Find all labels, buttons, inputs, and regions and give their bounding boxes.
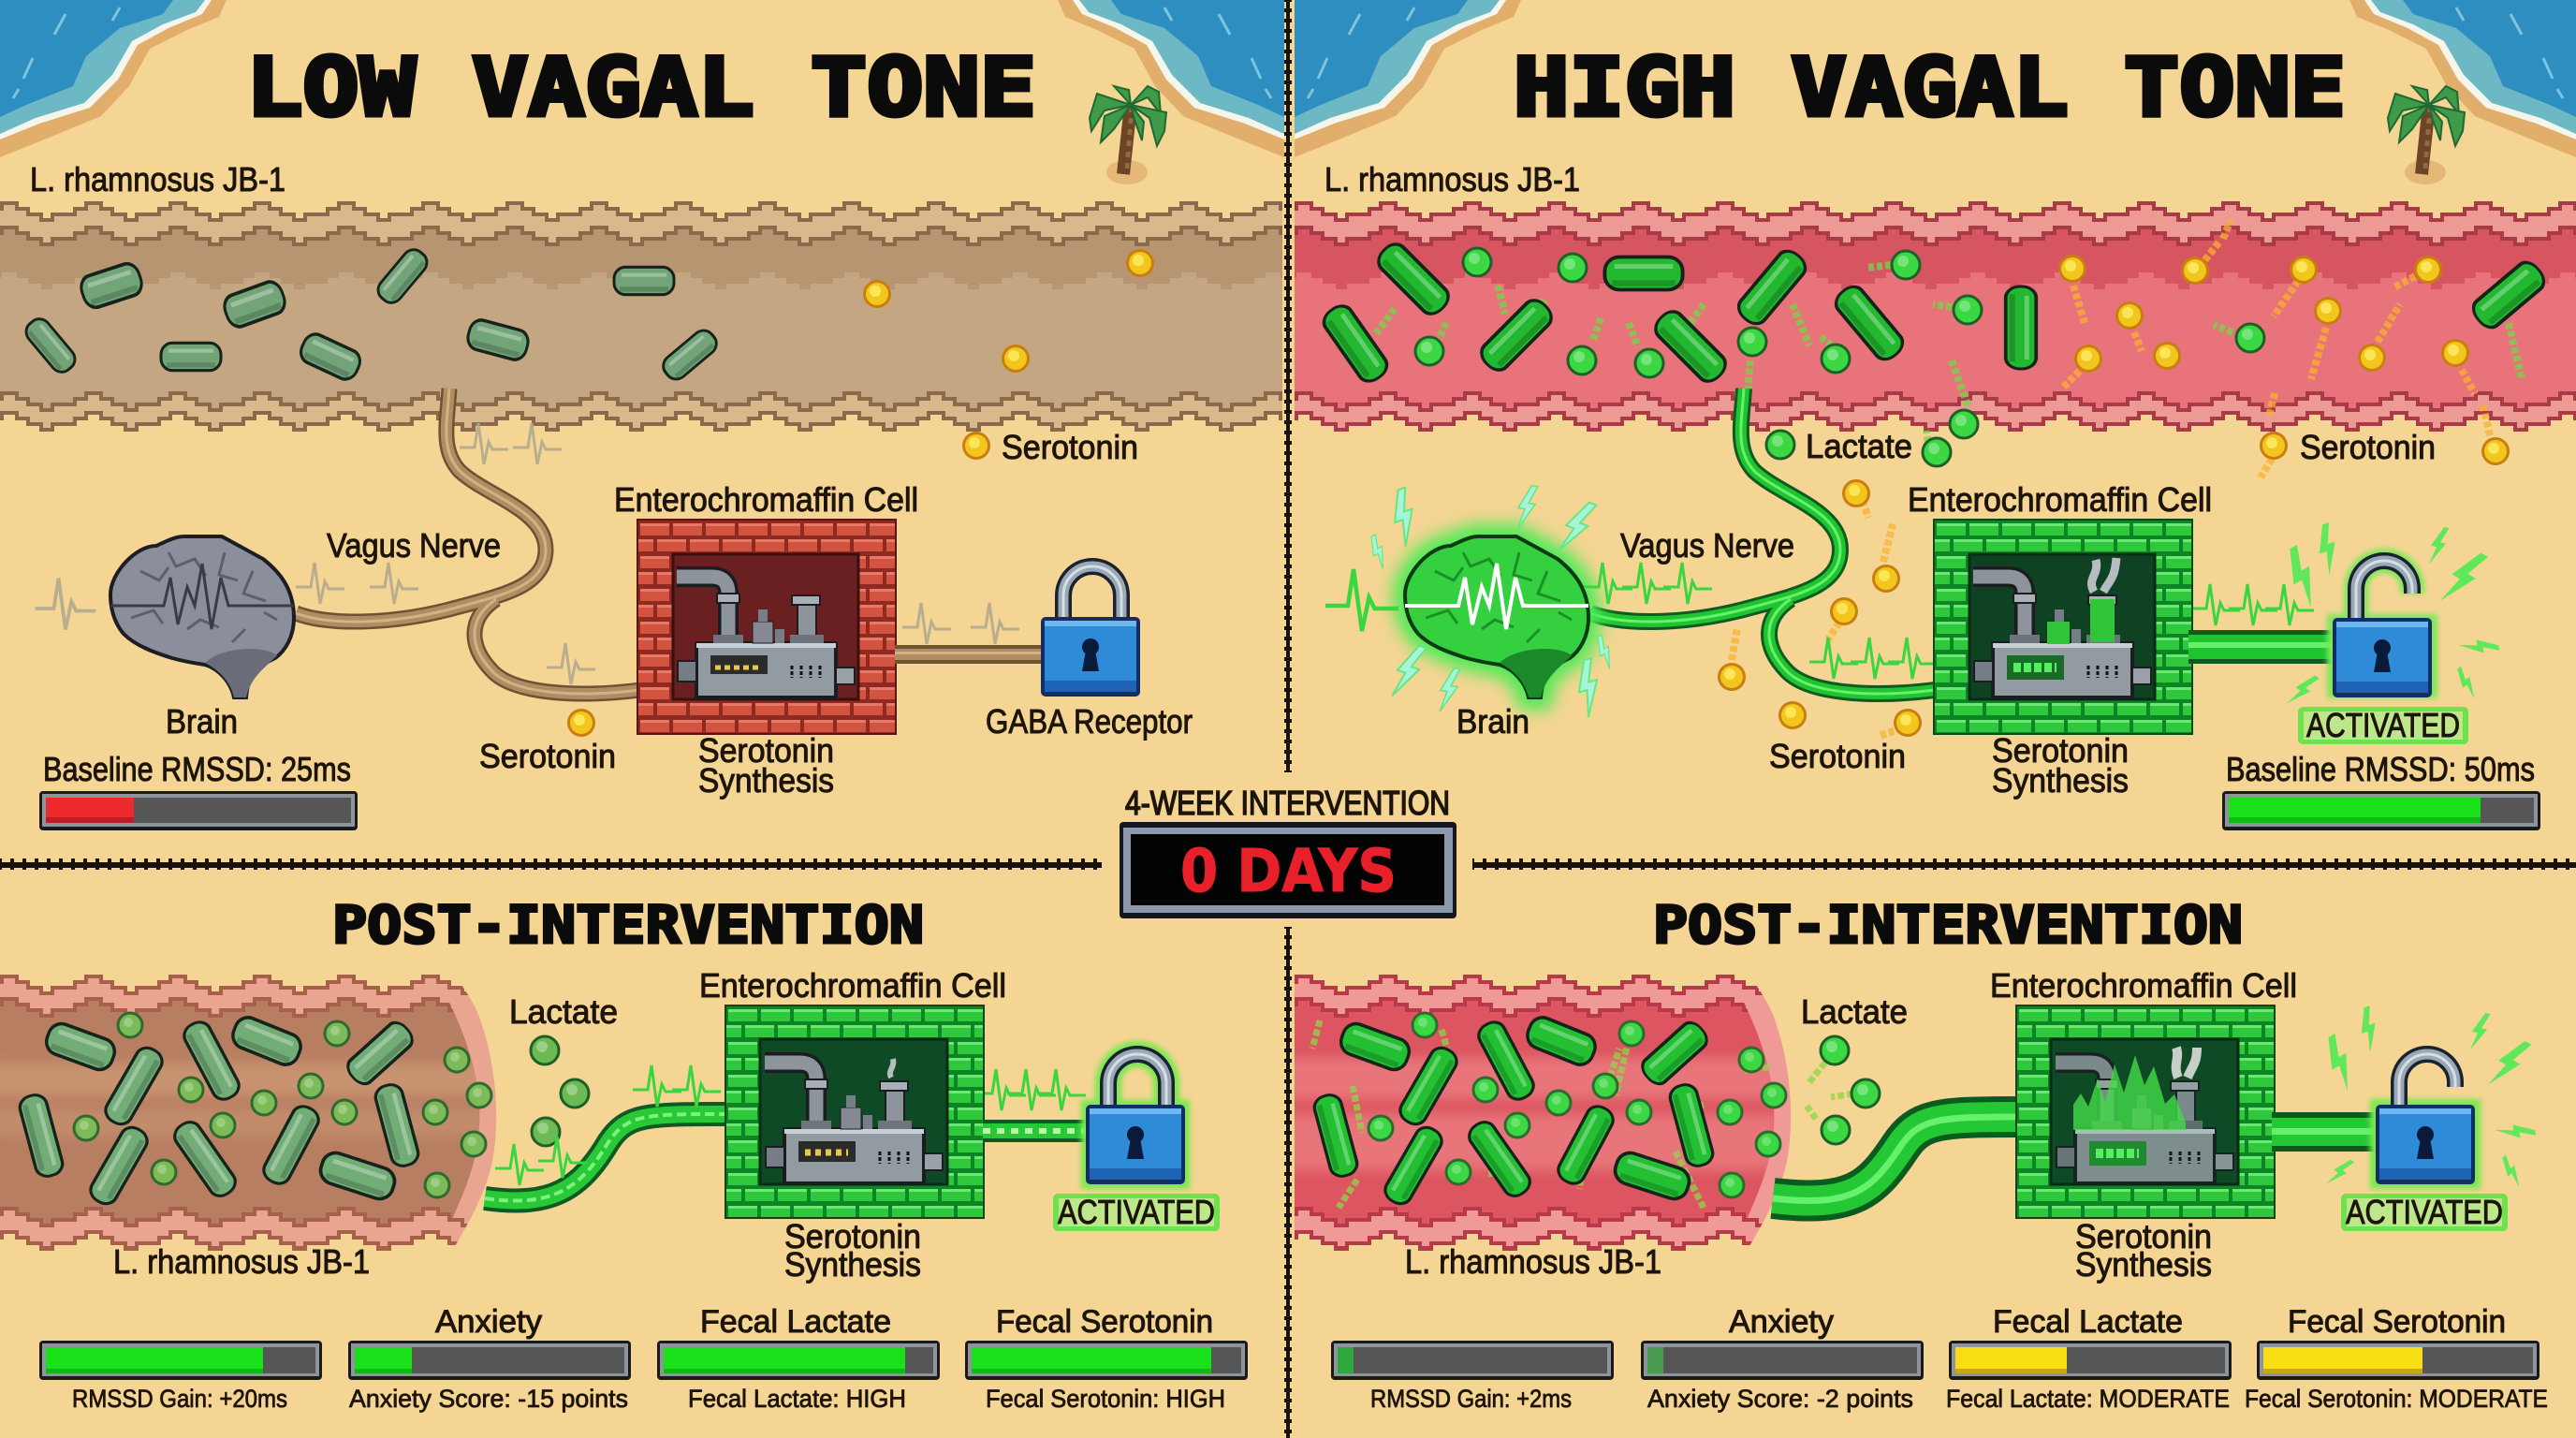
metric: fecal lactate: Fecal Lactate: HIGH (688, 1385, 906, 1413)
metric: fecal serotonin (965, 1304, 1248, 1413)
metric: fecal lactate (1946, 1304, 2232, 1413)
label: vagus nerve: Vagus Nerve (327, 526, 501, 565)
ocean: top left of low tone panel (0, 0, 227, 157)
panel: post-intervention high tone (1276, 895, 2576, 1413)
panel: low vagal tone (0, 41, 1329, 830)
timer display (1120, 822, 1456, 918)
wire to receptor (895, 645, 1041, 664)
lactate molecules in gut (74, 1013, 491, 1197)
label: baseline RMSSD: Baseline RMSSD: 25ms (43, 750, 351, 788)
enterochromaffin cell: green (724, 1005, 985, 1219)
ocean: top right of low tone panel (1058, 0, 1284, 157)
metric: anxiety (1641, 1304, 1924, 1413)
serotonin coins in gut (863, 249, 1154, 373)
bacteria: abundant moderate (18, 1014, 420, 1208)
brain: glowing green with lightning (1365, 484, 1618, 718)
serotonin coin with label (479, 709, 616, 775)
metric: fecal serotonin: Fecal Serotonin (2288, 1304, 2506, 1340)
badge: activated: ACTIVATED (2306, 706, 2460, 744)
faint heartbeat pulses (36, 423, 1019, 684)
metric: fecal lactate: Fecal Lactate (700, 1304, 891, 1340)
label: serotonin synthesis: Serotonin (1992, 731, 2129, 770)
gut cross-section: inflamed pink (1295, 201, 2576, 432)
lactate molecules (1415, 248, 2264, 466)
label: serotonin synthesis (2075, 1217, 2212, 1284)
panel: high vagal tone (1276, 41, 2576, 830)
timer value: 0 DAYS (1180, 837, 1397, 905)
metric: fecal lactate: Fecal Lactate: MODERATE (1946, 1385, 2230, 1413)
label: bacteria strain: L. rhamnosus JB-1 (1405, 1242, 1661, 1281)
metric: anxiety (348, 1304, 631, 1413)
metric: fecal serotonin: Fecal Serotonin (996, 1304, 1213, 1340)
wire to receptor (983, 1120, 1086, 1142)
progress bar: RMSSD low (39, 791, 358, 830)
brain: grey (110, 536, 294, 697)
metric: anxiety: Anxiety Score: -2 points (1647, 1385, 1913, 1413)
label: serotonin synthesis: Serotonin (2075, 1217, 2212, 1255)
enterochromaffin cell: red brick factory (637, 519, 897, 735)
metric: anxiety: Anxiety (1729, 1304, 1834, 1340)
heartbeat pulses: green (495, 1065, 1086, 1185)
title: HIGH VAGAL TONE (1514, 41, 2346, 135)
metric: anxiety: Anxiety (435, 1304, 542, 1340)
divider: vertical lower (1284, 927, 1292, 1438)
metric: anxiety: Anxiety Score: -15 points (349, 1385, 628, 1413)
label: serotonin synthesis (784, 1217, 921, 1284)
divider: vertical upper (1284, 0, 1292, 772)
label: vagus nerve: Vagus Nerve (1620, 526, 1794, 565)
icon: locked GABA receptor (1041, 566, 1140, 697)
label: serotonin synthesis (698, 731, 834, 800)
heading: POST-INTERVENTION (1653, 895, 2243, 955)
vagus nerve: bright green (1590, 389, 1935, 694)
enterochromaffin cell: green brick factory (1933, 519, 2193, 735)
metric: RMSSD gain: RMSSD Gain: +2ms (1370, 1385, 1572, 1413)
metric: RMSSD gain: RMSSD Gain: +20ms (72, 1385, 287, 1413)
heartbeat pulses: green (1325, 563, 2314, 679)
label: enterochromaffin cell: Enterochromaffin Cell (699, 966, 1006, 1005)
badge: activated: ACTIVATED (1058, 1193, 1215, 1231)
label: serotonin: Serotonin (1769, 737, 1906, 775)
metric: RMSSD gain (1331, 1341, 1614, 1413)
label: serotonin synthesis: Synthesis (784, 1245, 921, 1284)
label: enterochromaffin cell: Enterochromaffin Cell (1908, 480, 2212, 519)
label: serotonin synthesis: Synthesis (698, 761, 834, 800)
serotonin legend: Serotonin (1002, 428, 1138, 466)
icon: palm tree (2388, 86, 2465, 184)
label: 4-week intervention: 4-WEEK INTERVENTION (1125, 784, 1450, 822)
serotonin coin with label: Serotonin (479, 737, 616, 775)
label: lactate: Lactate (509, 992, 618, 1031)
icon: unlocked receptor with sparks (2317, 1005, 2536, 1190)
metric: fecal serotonin (2245, 1304, 2548, 1413)
label: serotonin synthesis (1992, 731, 2129, 800)
wire to receptor: thick green (2188, 630, 2333, 664)
serotonin legend: Serotonin (2300, 428, 2436, 466)
serotonin trails (1732, 220, 2490, 736)
badge: activated: ACTIVATED (2346, 1193, 2503, 1231)
lactate molecules released (531, 1036, 589, 1146)
label: brain: Brain (166, 702, 238, 741)
ocean: top right of high tone panel (2349, 0, 2576, 157)
label: serotonin synthesis: Serotonin (784, 1217, 921, 1255)
label: bacteria strain: L. rhamnosus JB-1 (30, 160, 285, 198)
heading: POST-INTERVENTION (332, 895, 924, 955)
lactate molecules released (1821, 1036, 1880, 1144)
divider: horizontal right (1472, 858, 2576, 870)
metric: fecal lactate: Fecal Lactate (1993, 1304, 2183, 1340)
label: serotonin synthesis: Synthesis (2075, 1245, 2212, 1284)
lactate trails (1312, 1020, 1853, 1208)
icon: palm tree (1090, 86, 1166, 184)
gut cross-section: dull tan (0, 201, 1282, 432)
wire to receptor: thick (2272, 1112, 2376, 1152)
label: lactate: Lactate (1801, 992, 1908, 1031)
divider: horizontal left (0, 858, 1102, 870)
icon: locked receptor with glow (1081, 1054, 1190, 1189)
label: enterochromaffin cell: Enterochromaffin Cell (1990, 966, 2297, 1005)
label: serotonin synthesis: Synthesis (1992, 761, 2129, 800)
label: brain: Brain (1456, 702, 1530, 741)
label: bacteria strain: L. rhamnosus JB-1 (1325, 160, 1580, 198)
gut segment: recovering (0, 975, 496, 1258)
vagus nerve: dull (296, 389, 640, 694)
enterochromaffin cell: green with glow (2015, 1005, 2276, 1219)
panel: post-intervention low tone (0, 895, 1329, 1413)
metric: fecal lactate (657, 1304, 940, 1413)
metric: fecal serotonin: Fecal Serotonin: MODERATE (2245, 1385, 2548, 1413)
lactate molecules in gut (1368, 1013, 1786, 1197)
label: enterochromaffin cell: Enterochromaffin Cell (614, 480, 918, 519)
progress bar: RMSSD high (2222, 791, 2540, 830)
label: bacteria strain: L. rhamnosus JB-1 (113, 1242, 370, 1281)
label: GABA receptor: GABA Receptor (986, 702, 1193, 741)
vagus nerve segment: thick (1773, 1117, 2017, 1201)
title: LOW VAGAL TONE (246, 41, 1036, 135)
ocean: top left of high tone panel (1295, 0, 1521, 157)
gut segment: inflamed (1295, 975, 1792, 1259)
bacteria: sparse dull (22, 245, 721, 384)
label: serotonin synthesis: Serotonin (698, 731, 834, 770)
metric: fecal serotonin: Fecal Serotonin: HIGH (986, 1385, 1225, 1413)
serotonin coins (1718, 255, 2510, 737)
bacteria: bright (1312, 1014, 1715, 1208)
lactate trails (1376, 265, 2522, 459)
vagus nerve segment (485, 1114, 726, 1200)
lactate legend: Lactate (1806, 427, 1912, 465)
bacteria: abundant bright (1319, 239, 2549, 387)
icon: unlocked GABA receptor with sparks (2277, 522, 2499, 711)
metric: RMSSD gain (39, 1341, 322, 1413)
